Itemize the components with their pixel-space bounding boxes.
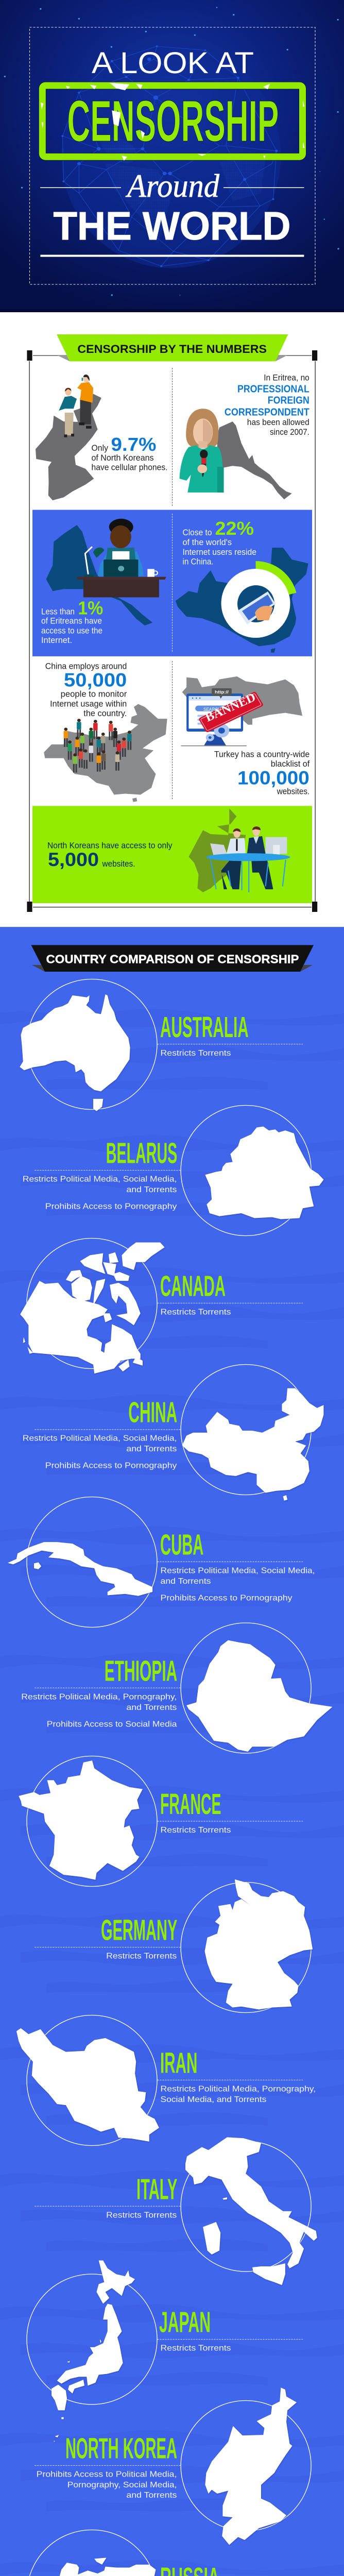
heading: IRAN — [160, 2046, 197, 2079]
country: france — [19, 1756, 303, 1887]
heading: AUSTRALIA — [160, 1011, 249, 1044]
text: 50,000: 50,000 — [64, 669, 127, 690]
title: a look at: A LOOK AT — [92, 46, 254, 80]
text: 1%: 1% — [78, 597, 103, 618]
heading: BELARUS — [106, 1137, 177, 1170]
text: 9.7%: 9.7% — [111, 434, 157, 455]
map: france — [19, 1760, 143, 1880]
restrictions: Social Media, and Torrents — [161, 2095, 266, 2104]
panel: hero header — [0, 0, 344, 312]
restrictions: Prohibits Access to Pornography — [45, 1462, 177, 1470]
text: 50,000 — [45, 662, 127, 718]
text: 100,000: 100,000 — [237, 768, 309, 789]
restrictions: and Torrents — [161, 1577, 211, 1586]
restrictions: Restricts Torrents — [106, 1952, 177, 1961]
map: china grey — [44, 704, 167, 802]
country: australia — [20, 979, 303, 1111]
text: professional foreign correspondent — [225, 373, 309, 437]
map: eritrea dark — [46, 525, 152, 625]
heading: ITALY — [136, 2173, 177, 2206]
map: russia — [19, 2558, 156, 2576]
country: china — [23, 1364, 323, 1501]
map: north korea — [36, 394, 101, 500]
text: 9.7%: of North Koreans — [92, 453, 153, 463]
restrictions: Prohibits Access to Political Media, — [37, 2470, 177, 2479]
stat: eritrea correspondent — [180, 373, 309, 499]
stat: north korea cell phones — [36, 375, 167, 500]
stat: china monitors — [44, 662, 167, 802]
text: 22%: 22% — [215, 518, 254, 539]
map: ethiopia — [186, 1640, 332, 1752]
country: ethiopia — [21, 1623, 332, 1753]
text: 1%: of Eritreans have — [41, 617, 102, 626]
heading: GERMANY — [101, 1913, 177, 1946]
map: turkey grey — [182, 676, 302, 725]
chart: 22% pie — [221, 561, 297, 638]
restrictions — [21, 1692, 177, 1728]
text: 100,000 — [214, 750, 310, 796]
icon: crowd of people — [64, 719, 132, 773]
country: iran — [16, 2015, 316, 2145]
map: north korea green — [188, 808, 246, 892]
text: 22% — [182, 518, 256, 567]
country: russia — [19, 2530, 303, 2576]
restrictions: Prohibits Access to Pornography — [45, 1202, 177, 1211]
restrictions: Prohibits Access to Social Media — [47, 1720, 177, 1728]
heading: NORTH KOREA — [65, 2432, 177, 2465]
text: 5,000: North Koreans have access to only — [47, 841, 173, 851]
restrictions: Restricts Political Media, Social Media, — [23, 1175, 177, 1184]
text: 50,000: the country. — [83, 709, 127, 718]
restrictions: Restricts Political Media, Social Media, — [161, 1566, 315, 1575]
restrictions: Restricts Torrents — [161, 1826, 231, 1835]
restrictions: and Torrents — [126, 1703, 177, 1712]
section ribbon: COUNTRY COMPARISON OF CENSORSHIP — [46, 953, 299, 966]
map: eritrea — [217, 421, 292, 499]
heading: CANADA — [160, 1269, 226, 1302]
restrictions — [161, 2084, 316, 2104]
country: belarus — [23, 1106, 323, 1235]
text: professional foreign correspondent: In Eritrea, no — [264, 373, 309, 382]
icon: people on phones — [59, 375, 93, 437]
text: 1%: Less than — [41, 607, 75, 616]
dividers — [172, 368, 173, 800]
map: germany — [205, 1879, 313, 2009]
map: cuba — [8, 1542, 152, 1596]
text: 5,000 — [47, 841, 173, 870]
label: search: SEARCH — [203, 707, 221, 712]
country: canada — [20, 1239, 303, 1374]
heading: ETHIOPIA — [105, 1654, 177, 1687]
icon: men at table — [206, 826, 290, 892]
text: 100,000: websites. — [277, 787, 309, 796]
text: 9.7% — [92, 434, 168, 472]
heading: CUBA — [160, 1528, 203, 1561]
restrictions — [23, 1434, 177, 1470]
icon: reporter with microphone — [180, 409, 224, 493]
restrictions: Restricts Torrents — [161, 1308, 231, 1316]
text: 22%: of the world's — [182, 538, 232, 547]
text: professional foreign correspondent: FOREIGN — [268, 395, 309, 406]
map: belarus — [205, 1126, 323, 1219]
stamp: banned: BANNED — [203, 690, 257, 724]
country: italy — [35, 2137, 317, 2285]
map: canada — [20, 1242, 165, 1374]
text: 9.7%: have cellular phones. — [92, 463, 168, 472]
text: professional foreign correspondent: has been allowed — [247, 418, 309, 427]
frame — [27, 350, 317, 912]
text: 22%: Internet users reside — [182, 548, 256, 557]
restrictions: and Torrents — [126, 2491, 177, 2500]
text: 22%: Close to — [182, 528, 212, 537]
dashed frame — [30, 27, 315, 284]
starfield — [4, 7, 339, 296]
heading: JAPAN — [159, 2306, 211, 2339]
text: 50,000: people to monitor — [61, 690, 127, 699]
country: france: FRANCE — [160, 1788, 221, 1821]
stat: turkey blacklist — [181, 676, 310, 796]
text: 1%: Internet. — [41, 636, 72, 645]
restrictions: and Torrents — [126, 1185, 177, 1194]
title box: censorship — [41, 83, 304, 161]
map: iran — [16, 2028, 159, 2142]
restrictions: Prohibits Access to Pornography — [161, 1594, 293, 1602]
text: 5,000: 5,000 — [48, 849, 99, 870]
text: professional foreign correspondent: PROFESSIONAL — [237, 383, 309, 395]
restrictions — [37, 2470, 177, 2500]
country: cuba — [8, 1497, 315, 1627]
stat: eritrea internet — [41, 519, 166, 645]
restrictions: and Torrents — [126, 1445, 177, 1453]
restrictions: Restricts Political Media, Pornography, — [161, 2084, 316, 2093]
panel: north korea websites — [32, 806, 312, 903]
map: italy — [185, 2137, 317, 2285]
text: 9.7%: Only — [92, 444, 109, 453]
text: professional foreign correspondent: CORRESPONDENT — [225, 406, 309, 418]
restrictions — [161, 1566, 315, 1602]
map: north korea — [205, 2387, 297, 2545]
text: 1% — [41, 597, 103, 645]
text: 50,000: China employs around — [45, 662, 127, 671]
text: 100,000: Turkey has a country-wide — [214, 750, 309, 759]
restrictions: Restricts Political Media, Pornography, — [21, 1692, 177, 1701]
panel: censorship by the numbers — [0, 312, 344, 927]
text: professional foreign correspondent: since 2007. — [270, 428, 309, 437]
text: 50,000: Internet usage within — [50, 699, 127, 708]
country: north korea — [35, 2387, 311, 2545]
restrictions: Restricts Political Media, Social Media, — [23, 1434, 177, 1443]
section ribbon — [31, 945, 314, 972]
map: china dark — [176, 548, 308, 653]
panel: country comparison — [0, 927, 344, 2576]
map: japan — [51, 2260, 135, 2442]
heading: CHINA — [128, 1396, 177, 1429]
restrictions: Restricts Torrents — [161, 2344, 231, 2353]
text: 5,000: websites. — [102, 859, 135, 869]
restrictions: Pornography, Social Media, — [67, 2481, 177, 2489]
text: 22%: in China. — [182, 557, 213, 567]
map: china — [182, 1388, 323, 1501]
icon: person at laptop — [77, 519, 166, 597]
panel: blue stats row — [32, 510, 312, 656]
label: http: http:// — [215, 689, 229, 694]
stat: china internet users — [176, 518, 308, 653]
section ribbon: CENSORSHIP BY THE NUMBERS — [77, 343, 267, 355]
country: germany — [35, 1879, 313, 2012]
restrictions: Restricts Torrents — [161, 1049, 231, 1058]
text: 100,000: blacklist of — [271, 759, 310, 769]
map: australia — [20, 994, 130, 1111]
title: the world: THE WORLD — [54, 204, 290, 248]
globe network — [61, 43, 281, 268]
icon: banned website monitor — [181, 688, 264, 746]
text: 1%: access to use the — [41, 626, 102, 636]
section ribbon — [57, 334, 288, 361]
restrictions: Restricts Torrents — [106, 2211, 177, 2219]
country: japan — [27, 2260, 303, 2442]
title: around: Around — [125, 167, 220, 204]
restrictions — [23, 1175, 177, 1211]
